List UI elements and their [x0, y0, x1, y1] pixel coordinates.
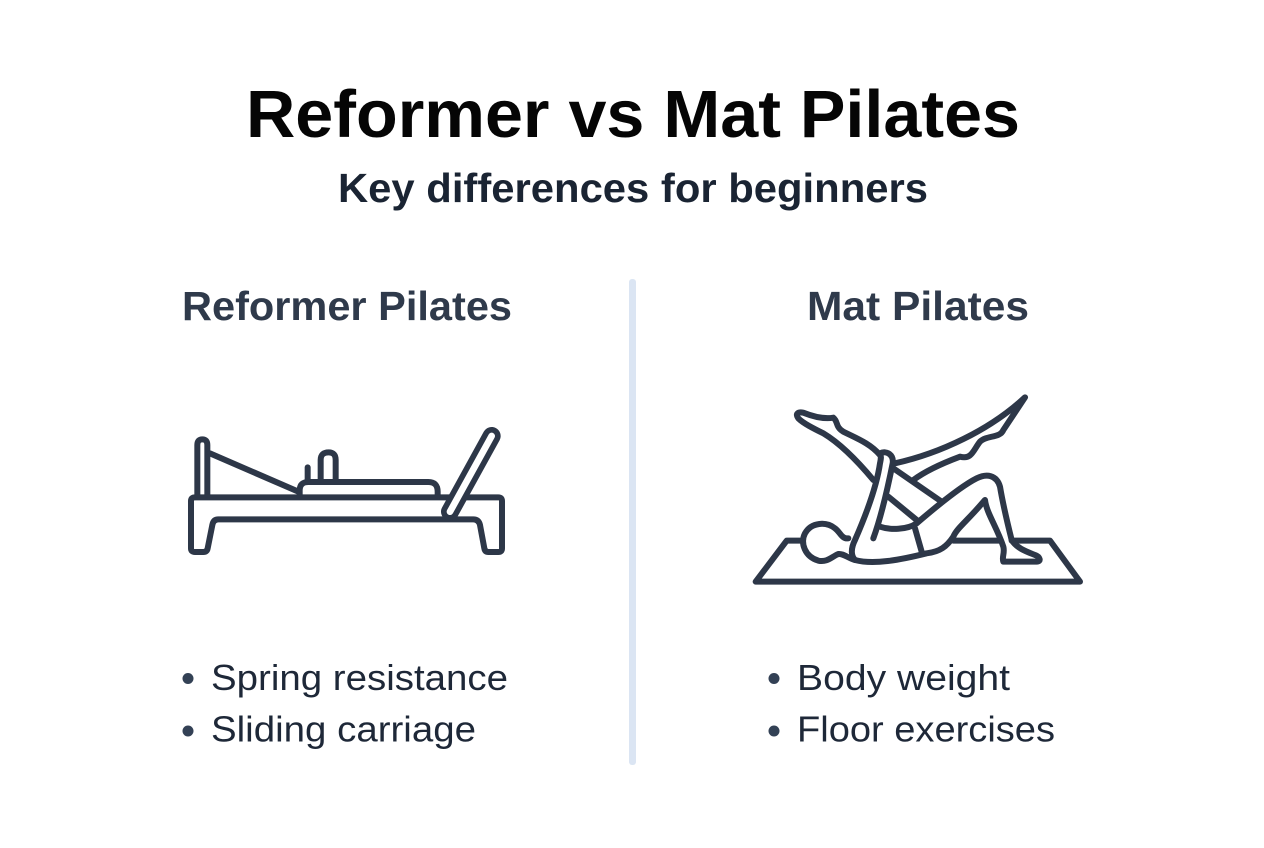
panel: reformer pilates: [182, 283, 512, 750]
panel: mat pilates: [756, 283, 1080, 750]
bullet list: mat: Floor exercises: [797, 708, 1055, 750]
bullet list: mat: Body weight: [797, 657, 1010, 698]
heading: mat pilates: Mat Pilates: [807, 283, 1029, 329]
icon: person on mat: [756, 397, 1080, 582]
bullet list: reformer: [182, 657, 508, 750]
subtitle: Key differences for beginners: [338, 165, 928, 211]
heading: reformer pilates: Reformer Pilates: [182, 283, 512, 329]
icon: reformer machine: [191, 436, 502, 552]
bullet list: reformer: Spring resistance: [211, 657, 508, 698]
title: Reformer vs Mat Pilates: [246, 77, 1020, 152]
divider: [629, 279, 636, 765]
bullet list: reformer: Sliding carriage: [211, 708, 476, 750]
bullet list: mat: [768, 657, 1055, 750]
